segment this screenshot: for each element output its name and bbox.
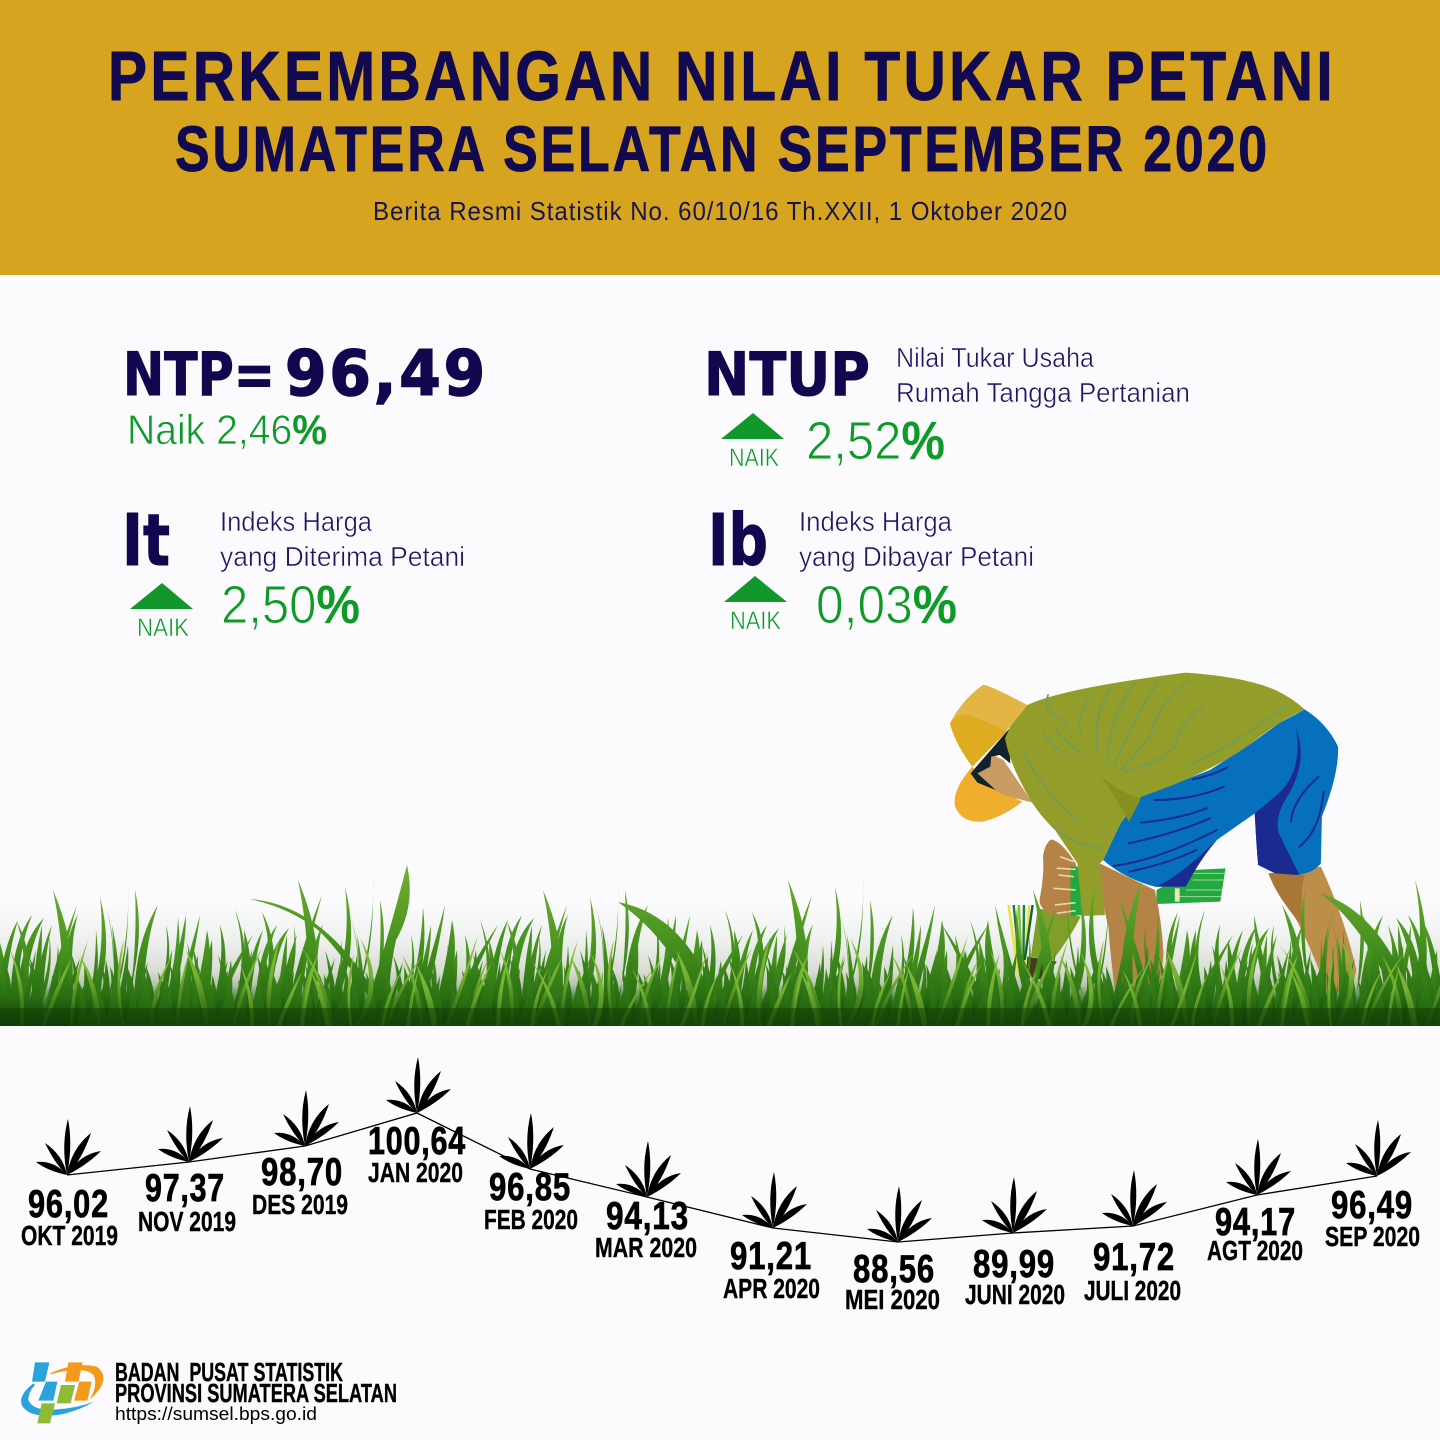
data point: Agt 2020: AGT 2020 xyxy=(1207,1235,1303,1266)
grass field xyxy=(0,865,1440,1040)
panel: It xyxy=(122,499,465,642)
NTUP heading: NTUP xyxy=(704,340,870,410)
data point: Jan 2020: 100,64 xyxy=(368,1120,466,1163)
data point: Apr 2020: APR 2020 xyxy=(723,1273,820,1304)
data point: Apr 2020 xyxy=(723,1235,820,1304)
mid grass blades xyxy=(6,945,1440,1008)
data point: Okt 2019 xyxy=(21,1183,118,1251)
data point: Sep 2020: 96,49 xyxy=(1331,1184,1413,1227)
NTP change: Naik 2,46% xyxy=(127,406,327,453)
NAIK label: NAIK xyxy=(137,614,189,642)
subtitle: Berita Resmi Statistik No. 60/10/16 Th.XXII, 1 Oktober 2020 xyxy=(373,196,1068,226)
data point: Juli 2020: JULI 2020 xyxy=(1084,1275,1181,1306)
NAIK label: NAIK xyxy=(729,444,779,472)
data point: Juli 2020 xyxy=(1084,1236,1181,1306)
data point: Jan 2020 xyxy=(368,1120,466,1188)
data point: Okt 2019: 96,02 xyxy=(28,1183,109,1226)
NTP value: 96,49 xyxy=(285,337,488,410)
NTUP description line 1: Nilai Tukar Usaha xyxy=(896,342,1094,373)
Ib percentage: 0,03% xyxy=(816,575,957,635)
short grass layer xyxy=(0,958,1440,1016)
It description line 1: Indeks Harga xyxy=(220,506,372,537)
data point: Okt 2019: OKT 2019 xyxy=(21,1220,118,1251)
data point: Mar 2020 xyxy=(595,1195,697,1263)
icon: up triangle xyxy=(724,576,787,602)
ground fade behind the grass xyxy=(0,905,1440,1026)
data point: Mar 2020: 94,13 xyxy=(606,1195,689,1238)
It heading: It xyxy=(122,499,170,582)
NTUP percentage: 2,52% xyxy=(806,411,945,471)
data point: Nov 2019: 97,37 xyxy=(145,1167,225,1210)
data point: Juli 2020: 91,72 xyxy=(1093,1236,1175,1279)
icon: BPS logo xyxy=(21,1362,103,1423)
NTP label: NTP= xyxy=(123,340,275,410)
data point: Des 2019: DES 2019 xyxy=(252,1189,348,1220)
data point: Feb 2020: FEB 2020 xyxy=(484,1204,578,1235)
line chart: NTP Oktober 2019 to September 2020 xyxy=(21,1057,1420,1315)
trend line xyxy=(67,1113,1377,1242)
data point: Juni 2020: JUNI 2020 xyxy=(965,1279,1065,1310)
data point: Juni 2020: 89,99 xyxy=(973,1243,1055,1286)
Ib description line 2: yang Dibayar Petani xyxy=(799,541,1034,572)
icon: rice plants xyxy=(36,1057,1411,1242)
data point: Mar 2020: MAR 2020 xyxy=(595,1232,697,1263)
It description line 2: yang Diterima Petani xyxy=(220,541,465,572)
panel: NTP xyxy=(123,337,488,453)
data point: Mei 2020 xyxy=(845,1248,940,1315)
icon: up triangle xyxy=(721,413,784,439)
NTUP description line 2: Rumah Tangga Pertanian xyxy=(896,377,1190,408)
It percentage: 2,50% xyxy=(221,575,360,635)
data point: Nov 2019: NOV 2019 xyxy=(138,1206,236,1237)
light grass highlights xyxy=(10,936,1440,1026)
organization name and URL xyxy=(115,1357,397,1424)
tall grass blades xyxy=(0,865,1440,1008)
organization name and URL: PROVINSI SUMATERA SELATAN xyxy=(115,1378,397,1408)
data point: Apr 2020: 91,21 xyxy=(730,1235,812,1278)
header banner xyxy=(0,0,1440,275)
data point: Agt 2020: 94,17 xyxy=(1215,1201,1296,1244)
data point: Feb 2020 xyxy=(484,1166,578,1235)
data point: Sep 2020 xyxy=(1325,1184,1420,1252)
data point: Des 2019: 98,70 xyxy=(261,1151,343,1194)
data point: Agt 2020 xyxy=(1207,1201,1303,1266)
data point: Des 2019 xyxy=(252,1151,348,1220)
organization name and URL: BADAN PUSAT STATISTIK xyxy=(115,1357,343,1387)
panel: NTUP xyxy=(704,340,1190,472)
NAIK label: NAIK xyxy=(730,607,781,635)
data point: Juni 2020 xyxy=(965,1243,1065,1310)
icon: up triangle xyxy=(130,583,193,609)
data point: Mei 2020: 88,56 xyxy=(853,1248,935,1291)
Ib heading: Ib xyxy=(708,499,768,582)
organization name and URL: https://sumsel.bps.go.id xyxy=(115,1404,317,1424)
data point: Nov 2019 xyxy=(138,1167,236,1237)
Ib description line 1: Indeks Harga xyxy=(799,506,952,537)
illustration: farmer planting rice xyxy=(950,673,1356,993)
data point: Feb 2020: 96,85 xyxy=(489,1166,571,1209)
data point: Mei 2020: MEI 2020 xyxy=(845,1284,940,1315)
panel: Ib xyxy=(708,499,1034,635)
data point: Jan 2020: JAN 2020 xyxy=(368,1157,463,1188)
